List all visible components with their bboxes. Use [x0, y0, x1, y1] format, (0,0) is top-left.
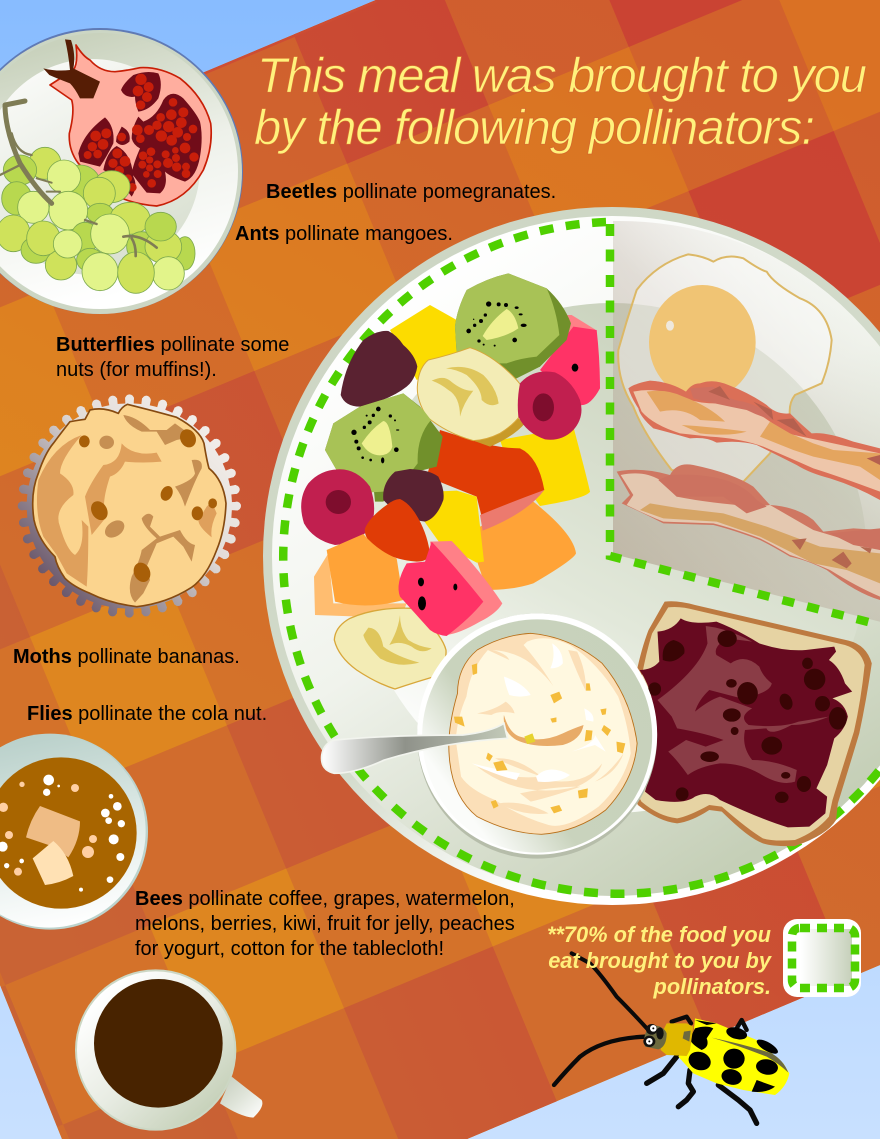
dashed green outline [283, 222, 880, 894]
berry right [518, 371, 581, 440]
peach wedge [477, 502, 576, 590]
text: butterflies: nuts (for muffins!). [56, 359, 217, 381]
footnote [547, 922, 773, 999]
watermelon lower [398, 541, 502, 636]
antennae [554, 953, 648, 1085]
banana lower [334, 608, 446, 689]
pomegranate [43, 39, 211, 206]
mango pieces back [390, 305, 590, 506]
tea surface [0, 757, 137, 909]
red fruit [427, 430, 544, 531]
kiwi top [455, 273, 571, 383]
legs [647, 1017, 757, 1123]
elytra [678, 1018, 789, 1095]
footnote: pollinators. [653, 974, 771, 999]
muffin [22, 399, 237, 613]
large plate [263, 207, 880, 905]
watermelon top [540, 315, 600, 405]
beetle [554, 953, 789, 1123]
head [643, 1024, 667, 1049]
banana top [417, 348, 527, 447]
mug handle [220, 1077, 262, 1118]
footnote: eat brought to you by [548, 948, 773, 973]
fried egg [618, 254, 832, 482]
berry left [301, 469, 374, 545]
cereal bowl [322, 613, 657, 859]
small plate: pomegranate and grapes [0, 28, 243, 314]
ice cubes [26, 806, 80, 885]
spots [686, 1020, 780, 1092]
footnote: **70% of the food you [547, 922, 771, 947]
fruit salad [301, 273, 600, 689]
orange melon left [314, 534, 407, 617]
coffee mug [75, 969, 262, 1131]
grape stems [0, 101, 157, 256]
title [254, 49, 867, 155]
bowl rim [417, 613, 657, 859]
title: This meal was brought to you [257, 49, 867, 103]
plum top [341, 331, 417, 407]
text: flies: Flies pollinate the cola nut. [27, 703, 267, 725]
spoon [322, 715, 584, 773]
text: bees: Bees pollinate coffee, grapes, watermelon, [135, 888, 515, 910]
mango middle [423, 491, 484, 563]
text: butterflies [56, 334, 289, 381]
muffin top [33, 404, 226, 607]
yogurt [449, 633, 637, 834]
title: by the following pollinators: [254, 101, 815, 155]
egg and bacon [617, 254, 880, 600]
bacon strips [617, 381, 880, 600]
grapes [0, 147, 195, 293]
text: butterflies: Butterflies pollinate some [56, 334, 289, 356]
text: ants: Ants pollinate mangoes. [235, 223, 453, 245]
grey slice overlay [613, 221, 880, 642]
plum lower [383, 469, 444, 522]
muffin wrapper [22, 399, 237, 613]
text: moths: Moths pollinate bananas. [13, 646, 240, 668]
tea cup with ice [0, 734, 148, 930]
text: bees [135, 888, 515, 960]
bubbles [0, 775, 125, 892]
toast with jelly [627, 601, 872, 846]
text: bees: for yogurt, cotton for the tablecloth! [135, 938, 444, 960]
cup body [0, 734, 148, 930]
kiwi lower [325, 393, 443, 502]
legend icon: dashed plate swatch [783, 919, 861, 997]
coffee [94, 979, 223, 1108]
red wedge [365, 499, 430, 562]
text: beetles: Beetles pollinate pomegranates. [266, 181, 556, 203]
plate rim [0, 28, 243, 314]
mug rim [75, 969, 236, 1131]
thorax [661, 1023, 693, 1056]
jelly spread [640, 618, 852, 827]
text: bees: melons, berries, kiwi, fruit for jelly, peaches [135, 913, 515, 935]
